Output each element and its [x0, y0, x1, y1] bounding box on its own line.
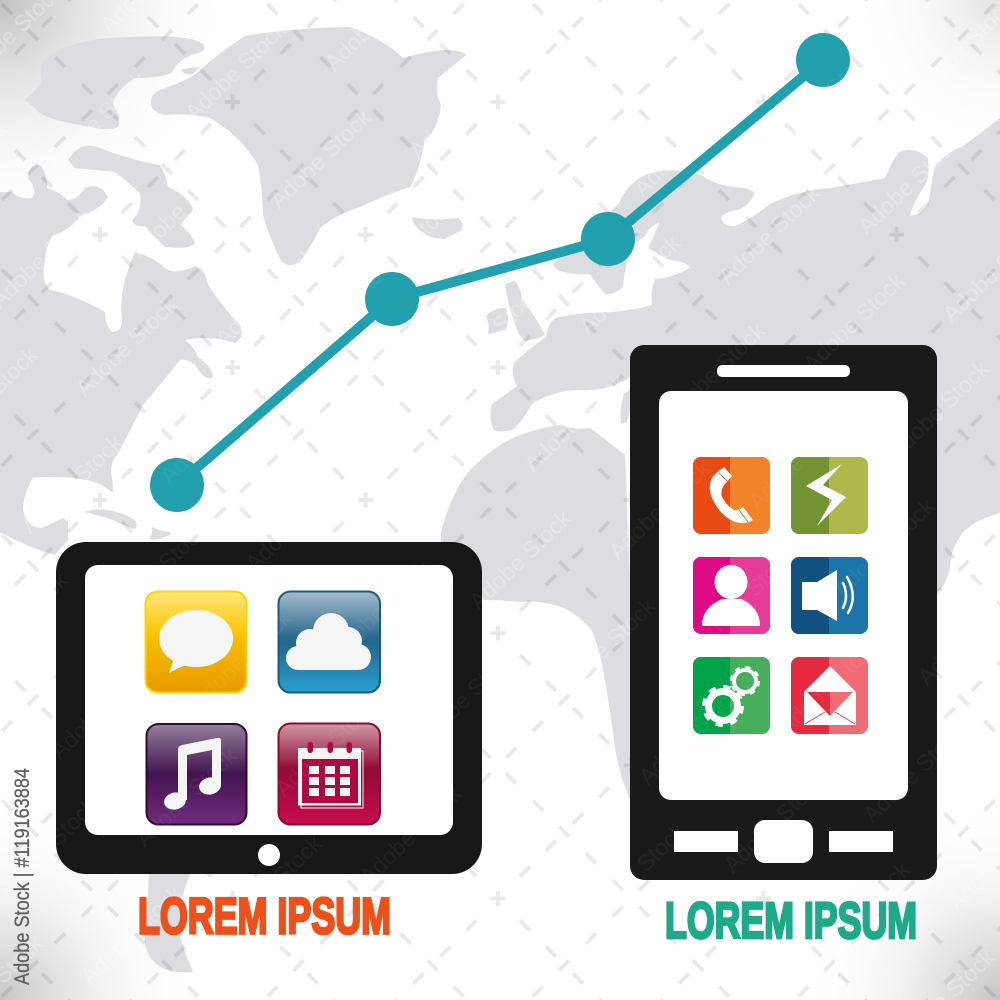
- icon: lightning bolt: [791, 457, 868, 534]
- tablet home button: [258, 844, 280, 866]
- map: hispaniola: [149, 527, 170, 540]
- phone left button: [674, 831, 738, 852]
- icon: cloud: [278, 592, 380, 692]
- map: greenland: [151, 27, 465, 265]
- map: south america tip: [145, 870, 193, 972]
- phone screen: [659, 391, 908, 800]
- map: united kingdom: [505, 281, 545, 341]
- phone home button: [754, 820, 813, 863]
- chart line: [177, 60, 823, 485]
- data point 2: [365, 272, 419, 326]
- map: north america: [0, 165, 242, 555]
- map: arctic island: [25, 36, 204, 129]
- map: africa: [441, 425, 640, 820]
- map: iceland: [412, 217, 462, 239]
- map: cuba: [85, 509, 137, 529]
- icon: speech bubble: [146, 592, 246, 692]
- data point 3: [581, 212, 635, 266]
- stock id text: Adobe Stock | #119163884: [11, 768, 34, 985]
- icon: person: [693, 557, 770, 634]
- tablet device: [56, 542, 482, 874]
- tablet screen: [85, 565, 453, 835]
- line chart: [150, 33, 850, 512]
- map: arctic archipelago: [68, 146, 195, 248]
- data point 1: [150, 458, 204, 512]
- icon: gears: [693, 657, 770, 734]
- icon: music note: [146, 724, 246, 824]
- data point 4: [796, 33, 850, 87]
- map: sliver island: [181, 67, 200, 74]
- map: italy: [620, 388, 632, 424]
- map: ireland: [486, 308, 508, 334]
- phone body: [630, 345, 937, 880]
- icon: envelope: [791, 657, 868, 734]
- icon: calendar: [278, 724, 380, 824]
- icon: speaker: [791, 557, 868, 634]
- label: left lorem ipsum: LOREM IPSUM: [138, 888, 391, 944]
- smartphone device: [630, 345, 937, 880]
- phone right button: [829, 831, 893, 852]
- phone speaker slot: [717, 365, 850, 377]
- icon: telephone: [693, 457, 770, 534]
- tablet body: [56, 542, 482, 874]
- map: eurasia: [490, 118, 1000, 593]
